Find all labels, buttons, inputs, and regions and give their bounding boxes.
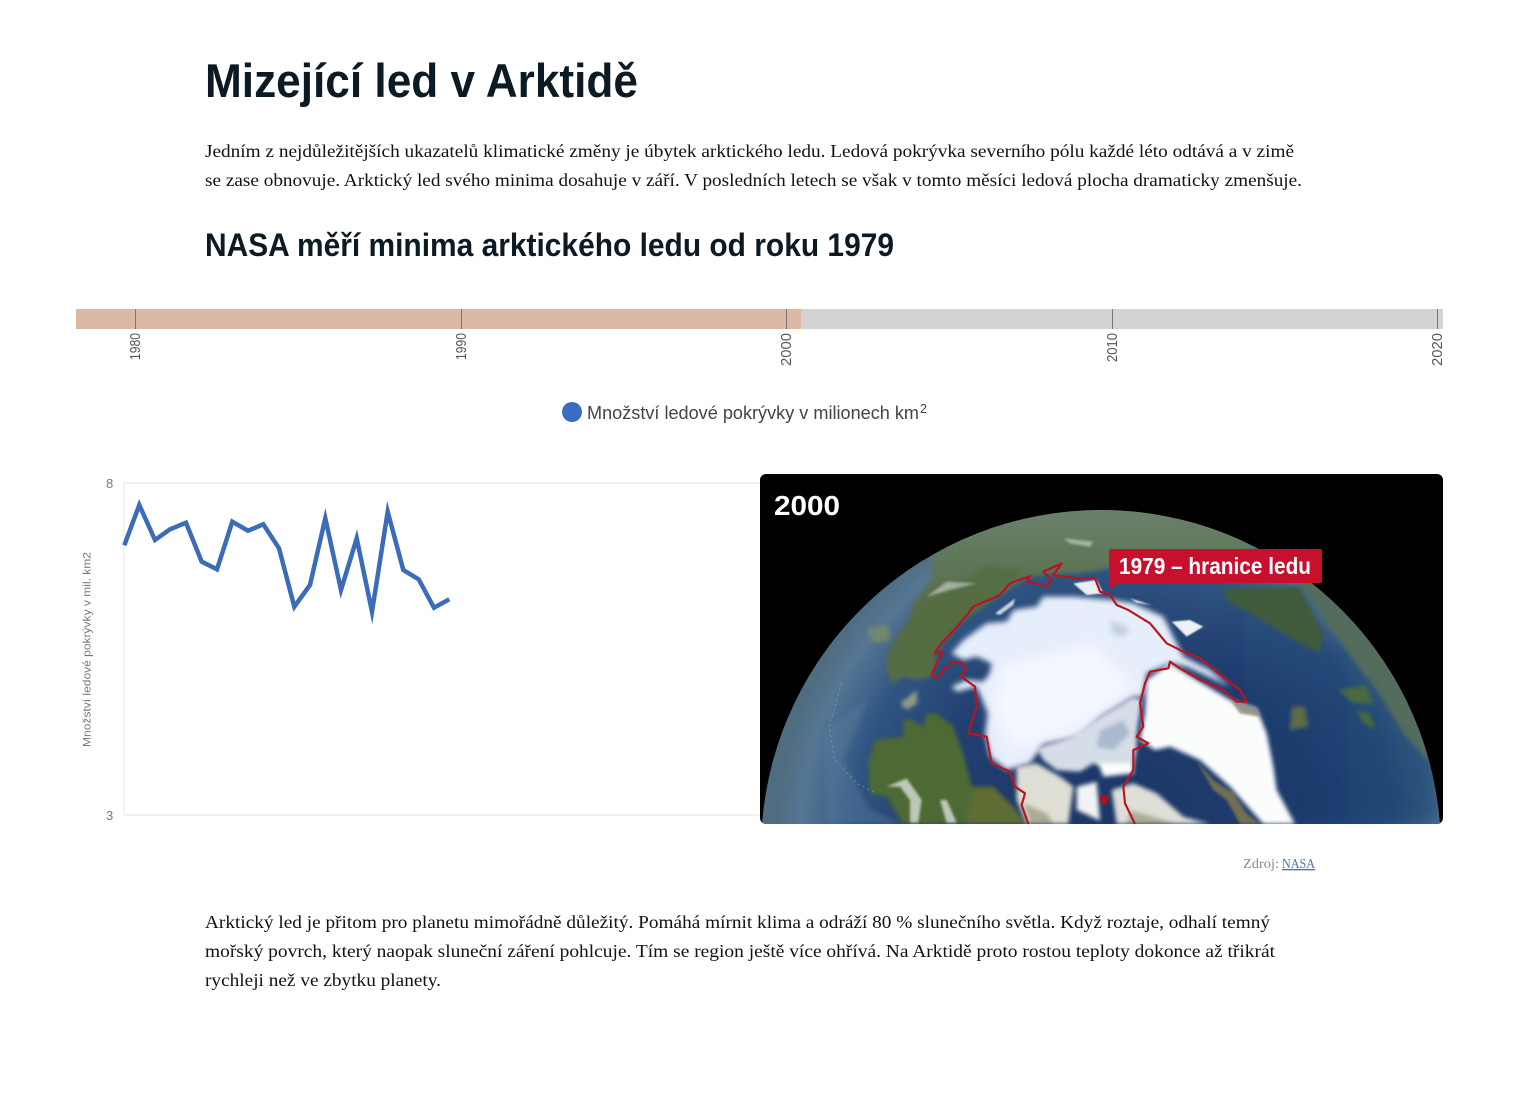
timeline year labels: 1990 — [453, 333, 470, 360]
callout pointer — [1109, 582, 1118, 590]
subheading: NASA měří minima arktického ledu od roku 1979 — [205, 227, 894, 263]
timeline year labels: 2010 — [1104, 333, 1121, 362]
1979 ice boundary — [932, 563, 1247, 824]
satellite image: Arctic ice in 2000 — [760, 474, 1450, 824]
Aleutian chain — [829, 683, 877, 793]
title: Mizející led v Arktidě — [205, 54, 638, 107]
globe — [762, 500, 1450, 824]
timeline year labels: 2020 — [1429, 333, 1446, 366]
timeline year labels: 2000 — [778, 333, 795, 366]
closing paragraph: Arktický led je přitom pro planetu mimořádně důležitý. Pomáhá mírnit klima a odráží 80 % slunečního světla. Když roztaje, odhalí temný — [205, 912, 1270, 932]
y axis ticks: 8 — [106, 476, 113, 491]
data line — [124, 505, 449, 612]
intro paragraph — [205, 141, 1302, 190]
closing paragraph: mořský povrch, který naopak sluneční záření pohlcuje. Tím se region ještě více ohřívá. Na Arktidě proto rostou teploty dokonce až třikrát — [205, 941, 1275, 961]
Canadian Arctic Archipelago — [1017, 697, 1210, 824]
North America — [868, 713, 1027, 824]
timeline year labels — [127, 333, 1446, 366]
closing paragraph: rychleji než ve zbytku planety. — [205, 970, 441, 990]
darker Atlantic — [1308, 634, 1440, 824]
y axis ticks: 3 — [106, 808, 113, 823]
snow flecks on Siberia — [927, 538, 1093, 597]
legend: 2 — [920, 401, 927, 416]
year label: 2000 — [774, 490, 840, 521]
callout: 1979 ice boundary: 1979 – hranice ledu — [1119, 553, 1311, 579]
Scandinavia and Europe — [1222, 547, 1430, 765]
continental shelf — [828, 706, 896, 824]
snow on Alaska — [887, 778, 957, 823]
source: Zdroj: — [1243, 856, 1279, 871]
sea ice — [952, 597, 1230, 770]
legend: Množství ledové pokrývky v milionech km — [587, 402, 919, 423]
timeline year labels: 1980 — [127, 333, 144, 360]
intro paragraph: Jedním z nejdůležitějších ukazatelů klimatické změny je úbytek arktického ledu. Ledová pokrývka severního pólu každé léto odtává a v zimě — [205, 141, 1294, 161]
timeline slider — [76, 309, 1446, 366]
timeline progress — [76, 309, 801, 329]
Siberia — [867, 500, 1253, 710]
closing paragraph — [205, 912, 1275, 990]
source: NASA — [1282, 856, 1315, 871]
y axis title: Množství ledové pokrývky v mil. km2 — [82, 552, 94, 747]
source — [1243, 856, 1315, 871]
intro paragraph: se zase obnovuje. Arktický led svého minima dosahuje v září. V posledních letech se však v tomto měsíci ledová plocha dramaticky zmenšuje. — [205, 170, 1302, 190]
boundary marker — [1100, 795, 1108, 805]
line chart — [82, 476, 1443, 823]
Greenland — [1140, 663, 1295, 824]
y axis ticks — [106, 476, 113, 823]
arctic islands — [995, 580, 1203, 637]
